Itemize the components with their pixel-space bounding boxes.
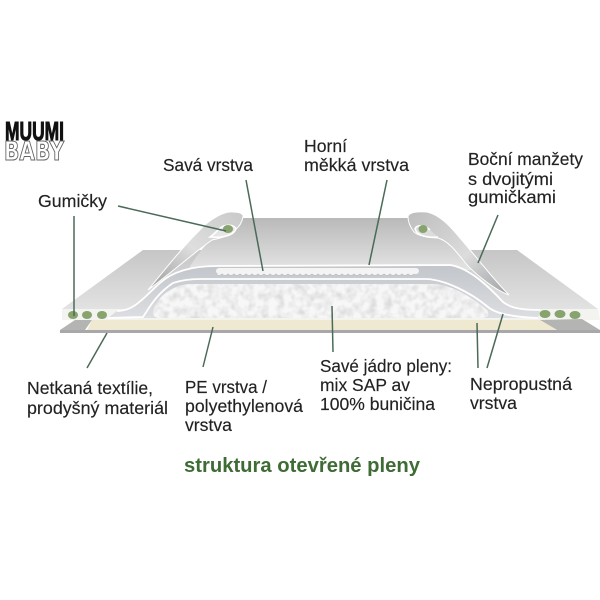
label: Netkaná textílie: prodyšný materiál	[27, 398, 168, 418]
label: Horní měkká vrstva: Horní	[304, 136, 347, 156]
title: struktura otevřené pleny	[184, 455, 421, 477]
label: Boční manžety: gumičkami	[468, 187, 556, 207]
front edge strip	[62, 309, 600, 320]
PE layer	[87, 320, 557, 330]
label: Savé jádro pleny: 100% buničina	[320, 394, 435, 414]
label: Nepropustná vrstva: vrstva	[470, 393, 517, 413]
label: PE vrstva: polyethylenová	[185, 396, 303, 416]
label: Boční manžety: Boční manžety	[468, 149, 583, 169]
elastics	[68, 225, 580, 319]
absorbent layer scallops	[216, 268, 419, 276]
label: Nepropustná vrstva	[470, 374, 572, 413]
inner channel	[108, 265, 540, 318]
left cuff	[148, 212, 243, 290]
non-woven layer, left	[60, 320, 92, 330]
logo: Muumi Baby: MUUMI	[5, 116, 64, 146]
left cuff pocket	[210, 225, 236, 237]
label: Netkaná textílie: Netkaná textílie,	[27, 378, 153, 398]
label: Netkaná textílie	[27, 378, 168, 418]
back sheet	[62, 250, 598, 309]
label: Boční manžety	[468, 149, 583, 207]
label: Nepropustná vrstva: Nepropustná	[470, 374, 572, 394]
label: PE vrstva: PE vrstva /	[185, 377, 267, 397]
leader lines	[74, 180, 503, 368]
top white liner	[117, 265, 540, 311]
label: Savé jádro pleny: Savé jádro pleny:	[320, 356, 452, 376]
absorbent core	[153, 284, 488, 318]
white line over core	[108, 279, 538, 318]
bottom band	[60, 330, 600, 333]
top soft panel	[188, 218, 478, 270]
label: Horní měkká vrstva: měkká vrstva	[304, 155, 409, 175]
label: PE vrstva: vrstva	[185, 415, 232, 435]
right cuff pocket	[415, 226, 438, 237]
logo: Muumi Baby: BABY	[4, 137, 65, 167]
label: Savé jádro pleny: mix SAP av	[320, 375, 410, 395]
non-woven layer, right	[540, 319, 600, 330]
label: Savá vrstva: Savá vrstva	[163, 155, 253, 175]
label: Horní měkká vrstva	[304, 136, 409, 175]
label: Gumičky: Gumičky	[38, 191, 107, 211]
label: Savé jádro pleny	[320, 356, 452, 414]
diagram: open diaper cross-section	[60, 212, 600, 333]
label: Boční manžety: s dvojitými	[468, 169, 553, 189]
right cuff	[408, 212, 509, 295]
label: PE vrstva	[185, 377, 303, 435]
logo: Muumi Baby	[4, 116, 65, 167]
